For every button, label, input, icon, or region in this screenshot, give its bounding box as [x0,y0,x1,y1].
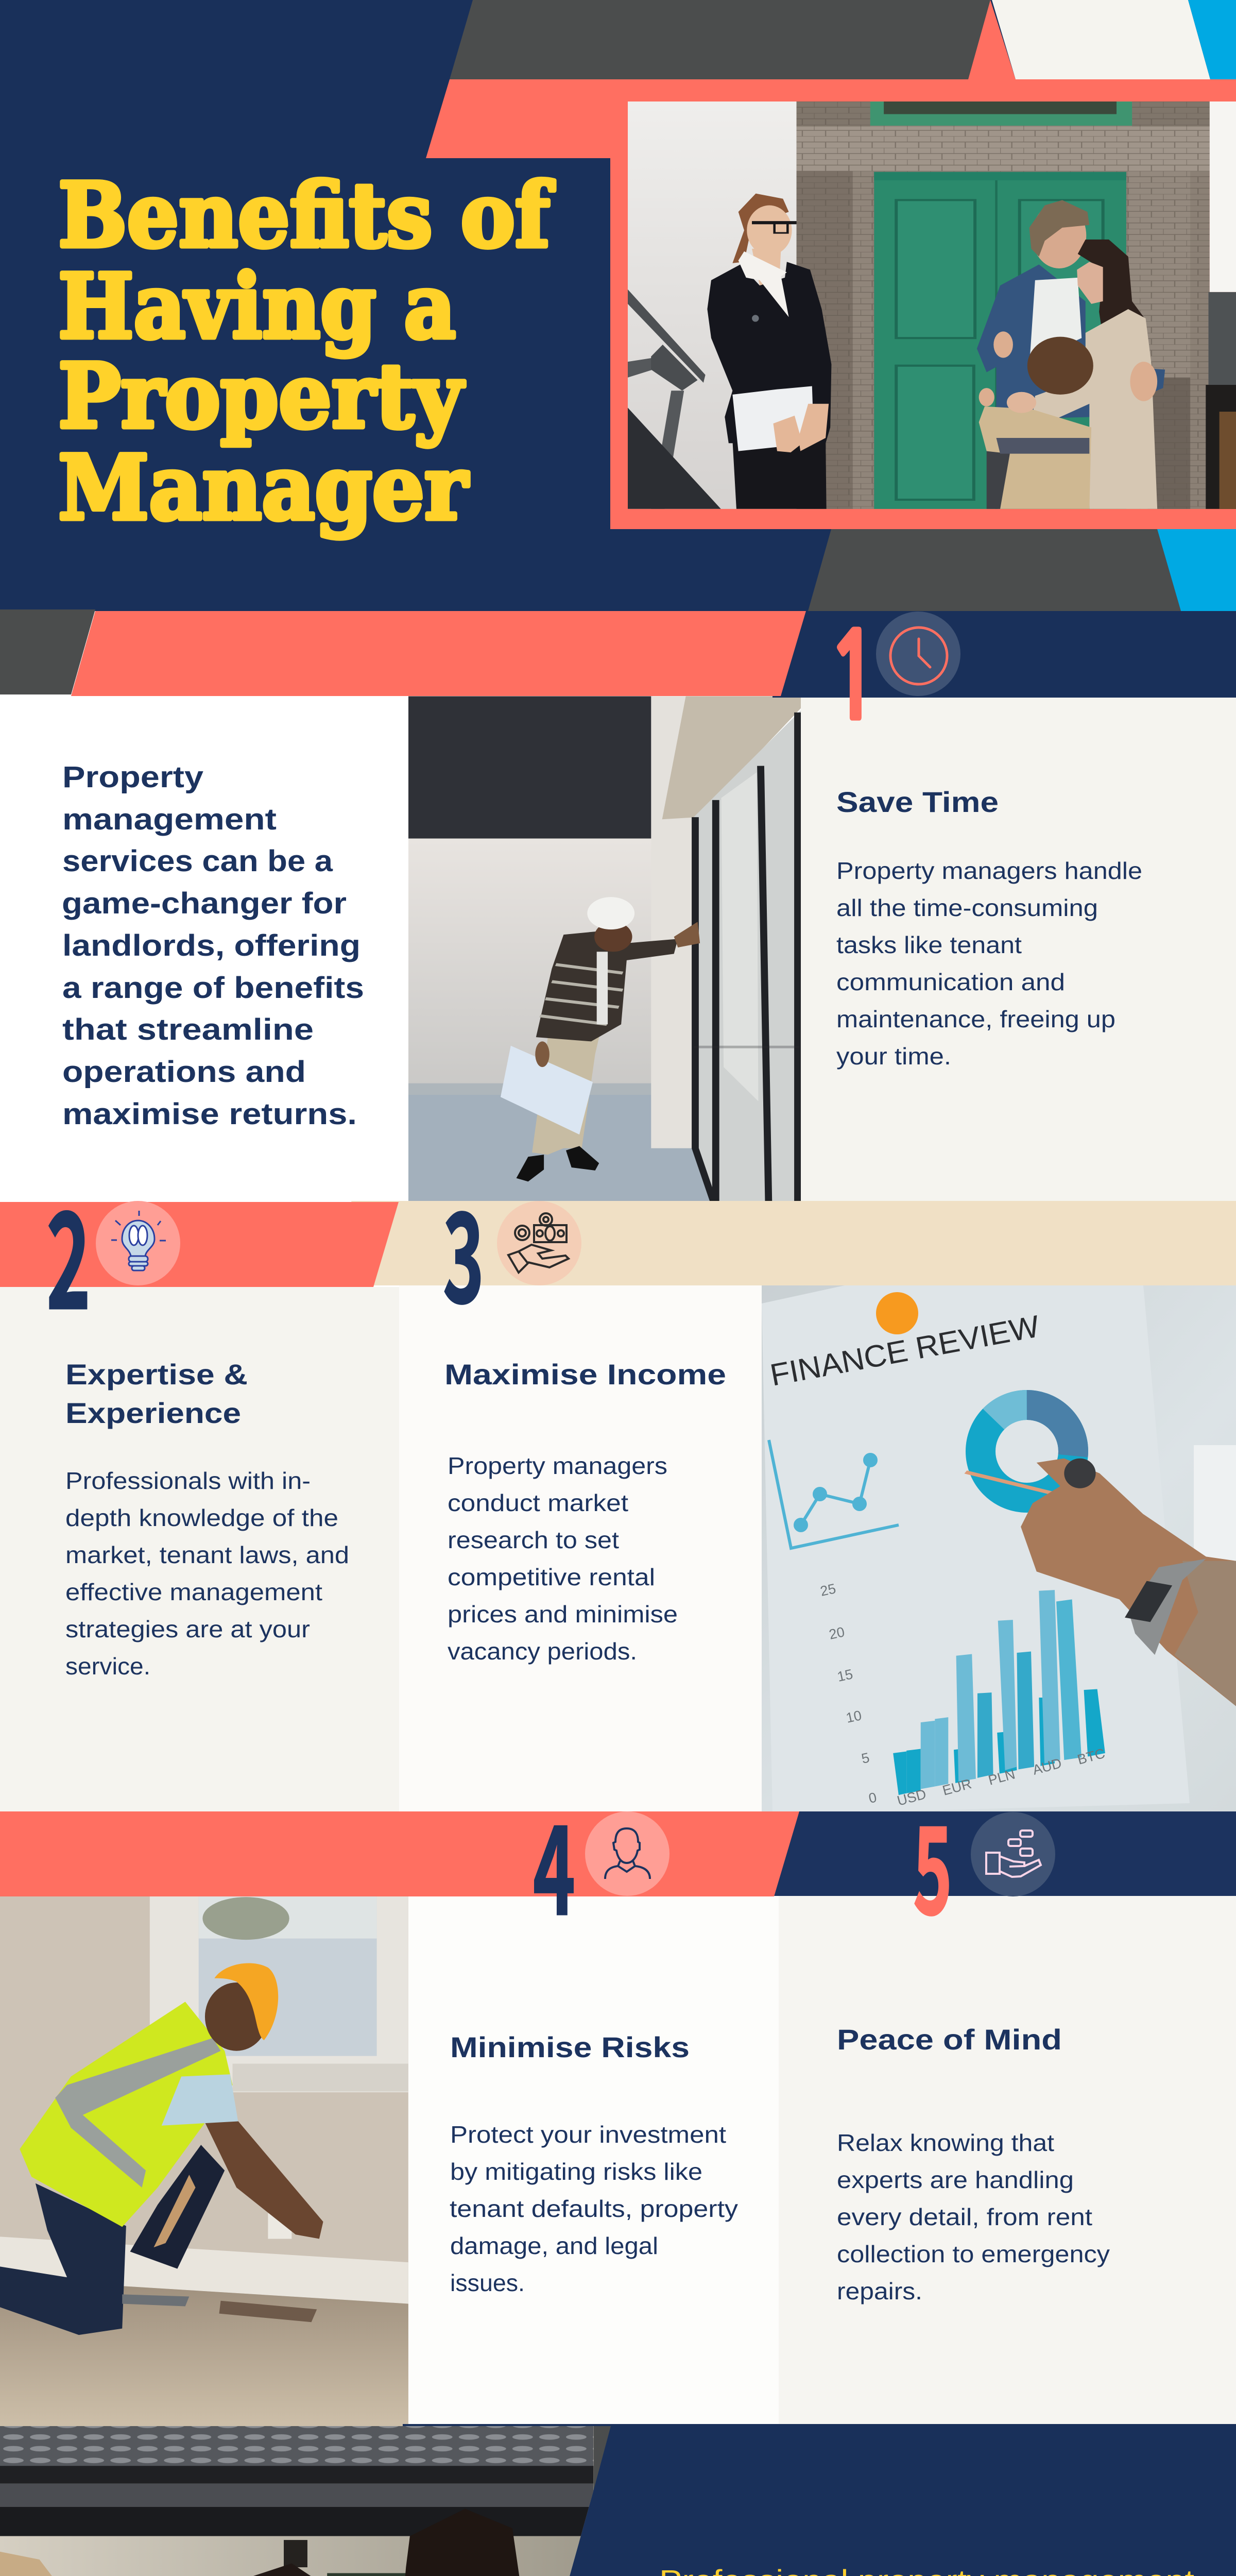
body: expertise: depth knowledge of the [65,1504,338,1531]
axis labels [819,1581,1107,1809]
band 1 [0,609,1236,737]
manager woman [707,194,831,509]
title: Having a [58,254,456,359]
axis labels: PLN [987,1766,1017,1788]
body: maximise income: competitive rental [448,1564,655,1590]
panel: peace of mind [779,1896,1236,2424]
band 3 [0,1772,1236,1950]
panel: save time [801,698,1236,1201]
panel: expertise and experience [0,1287,399,1811]
hero navy background [0,0,1236,611]
intro text: management [62,803,277,836]
icon: person [585,1811,670,1896]
number 5: 5 [913,1775,952,1949]
axis labels: AUD [1031,1755,1063,1778]
right man [363,2509,544,2576]
grey sliver beside closing panel [594,2426,611,2489]
number 4: 4 [533,1772,575,1950]
number 1: 1 [827,618,881,737]
body: expertise: Professionals with in- [65,1467,311,1494]
heading: maximise income: Maximise Income [444,1358,726,1391]
hand with pen and watch [966,1459,1236,1706]
body: minimise risks [450,2121,738,2296]
axis labels: 25 [819,1581,837,1599]
intro text: that streamline [62,1013,314,1046]
intro text: Property [62,760,203,794]
icon: lightbulb brain [96,1201,180,1285]
intro text: operations and [62,1055,306,1089]
axis labels: 15 [836,1666,854,1685]
body: save time: your time. [836,1043,951,1070]
centre woman [153,2564,398,2576]
body: maximise income: vacancy periods. [448,1638,637,1665]
body: save time: maintenance, freeing up [836,1006,1115,1032]
body: minimise risks: Protect your investment [450,2121,726,2148]
body: peace of mind: Relax knowing that [837,2129,1054,2156]
intro text: services can be a [62,844,333,878]
panel: intro [0,696,408,1202]
family [977,200,1165,509]
worker figure [0,1963,323,2335]
photo caption text: FINANCE REVIEW [767,1309,1042,1393]
body: save time: Property managers handle [836,857,1142,884]
axis labels: 5 [860,1750,871,1767]
photo: finance review chart with hand and pen [762,1285,1236,1811]
body: peace of mind: collection to emergency [837,2241,1110,2267]
hero photo: property manager with family at green door [628,101,1236,509]
body: save time [836,857,1142,1070]
number 3: 3 [443,1160,484,1338]
photo: inspector with blueprint at glass door [408,696,801,1201]
body: expertise: effective management [65,1579,322,1605]
number 2: 2 [46,1155,91,1347]
heading: expertise [65,1358,248,1429]
body: expertise: strategies are at your [65,1616,310,1642]
axis labels: BTC [1076,1745,1107,1768]
panel: maximise income [399,1285,762,1811]
panel: closing navy [403,2424,1236,2576]
heading: save time: Save Time [836,786,999,818]
body: minimise risks: damage, and legal [450,2232,658,2259]
body: minimise risks: issues. [450,2269,525,2296]
hero decorative blocks [426,0,1236,611]
body: maximise income: Property managers [448,1452,667,1479]
axis labels: USD [896,1786,928,1809]
orange pin [876,1292,918,1334]
title: Manager [58,435,469,540]
body: peace of mind: experts are handling [837,2166,1074,2193]
bar chart [893,1590,1105,1795]
title [58,163,555,540]
body: maximise income: prices and minimise [448,1601,678,1628]
body: minimise risks: by mitigating risks like [450,2158,702,2185]
intro text: landlords, offering [62,929,360,962]
heading: expertise: Experience [65,1397,241,1429]
body: maximise income: research to set [448,1527,619,1553]
axis labels: 0 [867,1789,878,1806]
body: maximise income: conduct market [448,1489,628,1516]
title: Benefits of [58,163,555,267]
heading: peace of mind: Peace of Mind [837,2023,1062,2056]
heading: expertise: Expertise & [65,1358,248,1391]
body: peace of mind: every detail, from rent [837,2204,1092,2230]
photo: handshake outside house [0,2426,613,2576]
intro text: a range of benefits [62,971,364,1005]
body: minimise risks: tenant defaults, property [450,2195,738,2222]
body: save time: tasks like tenant [836,931,1022,958]
intro text: maximise returns. [62,1097,357,1131]
left woman [0,2552,169,2576]
heading: minimise risks: Minimise Risks [450,2031,690,2063]
icon: clock [876,612,960,696]
icon: money and hand [497,1201,581,1285]
body: peace of mind [837,2129,1110,2304]
photo: worker in hi-vis vest at skirting board [0,1896,408,2428]
intro text [62,760,364,1131]
body: expertise: service. [65,1653,150,1680]
panel: minimise risks [408,1896,779,2424]
body: save time: communication and [836,969,1065,995]
body: save time: all the time-consuming [836,894,1098,921]
body: maximise income [448,1452,678,1665]
icon: hand with coins [971,1812,1055,1896]
donut chart [981,1405,1073,1498]
intro text: game-changer for [62,887,347,920]
inspector figure [501,897,700,1181]
axis labels: 20 [828,1624,846,1642]
body: peace of mind: repairs. [837,2278,922,2304]
body: expertise: market, tenant laws, and [65,1541,349,1568]
body: expertise [65,1467,349,1680]
stair railing [628,290,721,509]
axis labels: 10 [845,1707,863,1726]
title: Property [58,344,465,448]
axis labels: EUR [941,1776,973,1799]
band 2 [0,1155,1236,1347]
line chart [769,1440,899,1548]
